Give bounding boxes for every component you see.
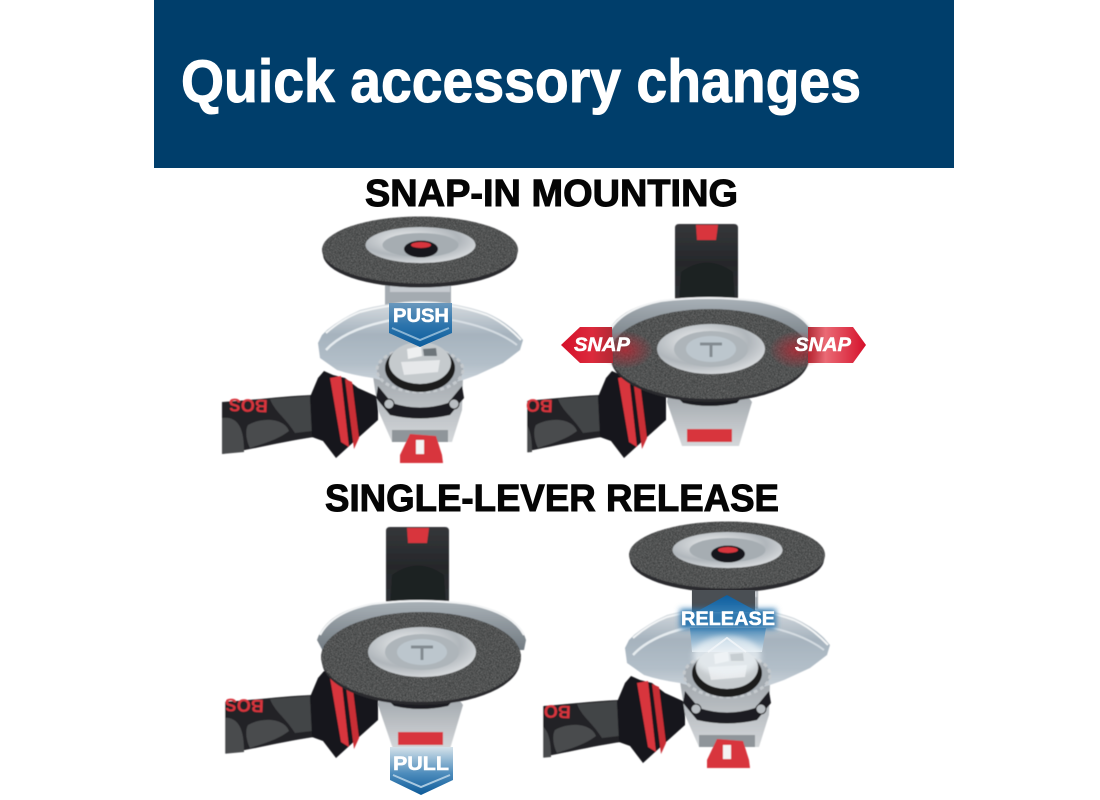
push arrow: PUSH (393, 306, 449, 327)
grinder with disc lifted (525, 522, 830, 768)
panel: release grinder (525, 522, 830, 768)
title: Quick accessory changes (181, 48, 861, 115)
snap arrow left: SNAP (574, 335, 630, 356)
grinder with disc and lever (215, 527, 526, 760)
push arrow (389, 303, 452, 347)
release arrow: RELEASE (681, 609, 775, 630)
heading: snap-in mounting: SNAP-IN MOUNTING (365, 173, 738, 215)
grinder with disc and lever: BOS (224, 695, 264, 716)
grinder with disc lifted: BO (543, 701, 571, 722)
snap arrow left (561, 327, 653, 369)
panel: push to mount grinder (222, 216, 523, 463)
panel: snap grinder (500, 224, 866, 460)
pull arrow (390, 747, 453, 795)
release arrow (680, 590, 776, 676)
grinder handle (222, 371, 378, 458)
title banner (154, 0, 954, 168)
panel: pull lever grinder (215, 527, 526, 795)
grinder with seated disc (500, 224, 815, 460)
snap arrow right: SNAP (795, 335, 851, 356)
pull arrow: PULL (393, 754, 449, 775)
grinder with disc above guard (318, 216, 523, 463)
grinder handle: BOS (228, 395, 268, 416)
grinder with seated disc: BO (525, 395, 553, 416)
snap arrow right (769, 327, 866, 369)
heading: single-lever release: SINGLE-LEVER RELEASE (325, 478, 779, 520)
